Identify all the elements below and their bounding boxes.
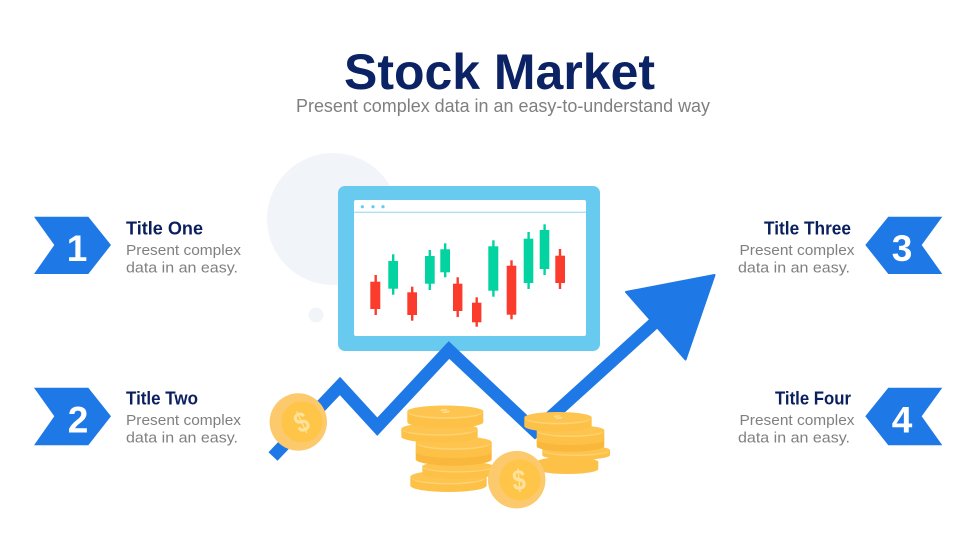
bottom dollar coin: $ [511, 463, 527, 497]
text block: item 2 body [126, 412, 242, 446]
icon: chevron badge 3: 3 [892, 228, 912, 269]
text block: item 4 body [738, 412, 855, 446]
coin K [537, 457, 598, 474]
coin B [401, 423, 478, 443]
icon: chevron badge 4: 4 [892, 400, 913, 441]
subtitle: Present complex data in an easy-to-understand way [296, 96, 710, 116]
bottom dollar coin [488, 451, 546, 509]
item 4 [738, 388, 942, 446]
text block: item 2 body: Present complex [126, 412, 242, 429]
coin J [542, 445, 610, 460]
item 3 [738, 217, 942, 276]
icon: chevron badge 3 [865, 217, 942, 274]
coin D [416, 445, 492, 466]
monitor frame [338, 186, 600, 351]
heading: Title Three: Title Three [764, 218, 851, 238]
text block: item 1 body: data in an easy. [126, 260, 238, 276]
coin G [524, 412, 592, 432]
coin I [537, 433, 604, 452]
right coin stack [524, 412, 610, 474]
heading: Title Four: Title Four [775, 388, 851, 408]
text block: item 1 body [126, 242, 242, 276]
left coin stack [401, 406, 493, 492]
rising zigzag arrow [273, 275, 714, 456]
text block: item 3 body [738, 242, 855, 276]
icon: chevron badge 4 [865, 388, 942, 445]
coin F [410, 470, 487, 492]
text block: item 3 body: data in an easy. [738, 260, 850, 276]
right coin stack: $ [552, 415, 565, 420]
item 2 [34, 388, 242, 446]
text block: item 1 body: Present complex [126, 242, 242, 259]
left dollar coin: $ [289, 404, 315, 440]
heading: Title Two: Title Two [126, 388, 198, 408]
title: Stock Market [344, 44, 655, 100]
left dollar coin [270, 393, 327, 451]
icon: chevron badge 1: 1 [67, 228, 87, 269]
coin A [407, 406, 483, 428]
item 1 [34, 217, 242, 276]
left coin stack: $ [439, 408, 453, 414]
background circles [267, 153, 399, 322]
coin H [537, 425, 604, 445]
text block: item 4 body: Present complex [740, 412, 855, 429]
text block: item 3 body: Present complex [740, 242, 855, 259]
text block: item 4 body: data in an easy. [738, 430, 850, 446]
heading: Title One: Title One [126, 218, 203, 238]
icon: chevron badge 1 [34, 217, 111, 274]
text block: item 2 body: data in an easy. [126, 430, 238, 446]
icon: chevron badge 2: 2 [68, 400, 88, 441]
coin C [416, 436, 492, 458]
candlestick chart [370, 224, 565, 327]
icon: chevron badge 2 [34, 388, 111, 445]
monitor with candlestick chart [338, 186, 600, 351]
browser window [354, 200, 586, 336]
coin E [422, 462, 493, 479]
